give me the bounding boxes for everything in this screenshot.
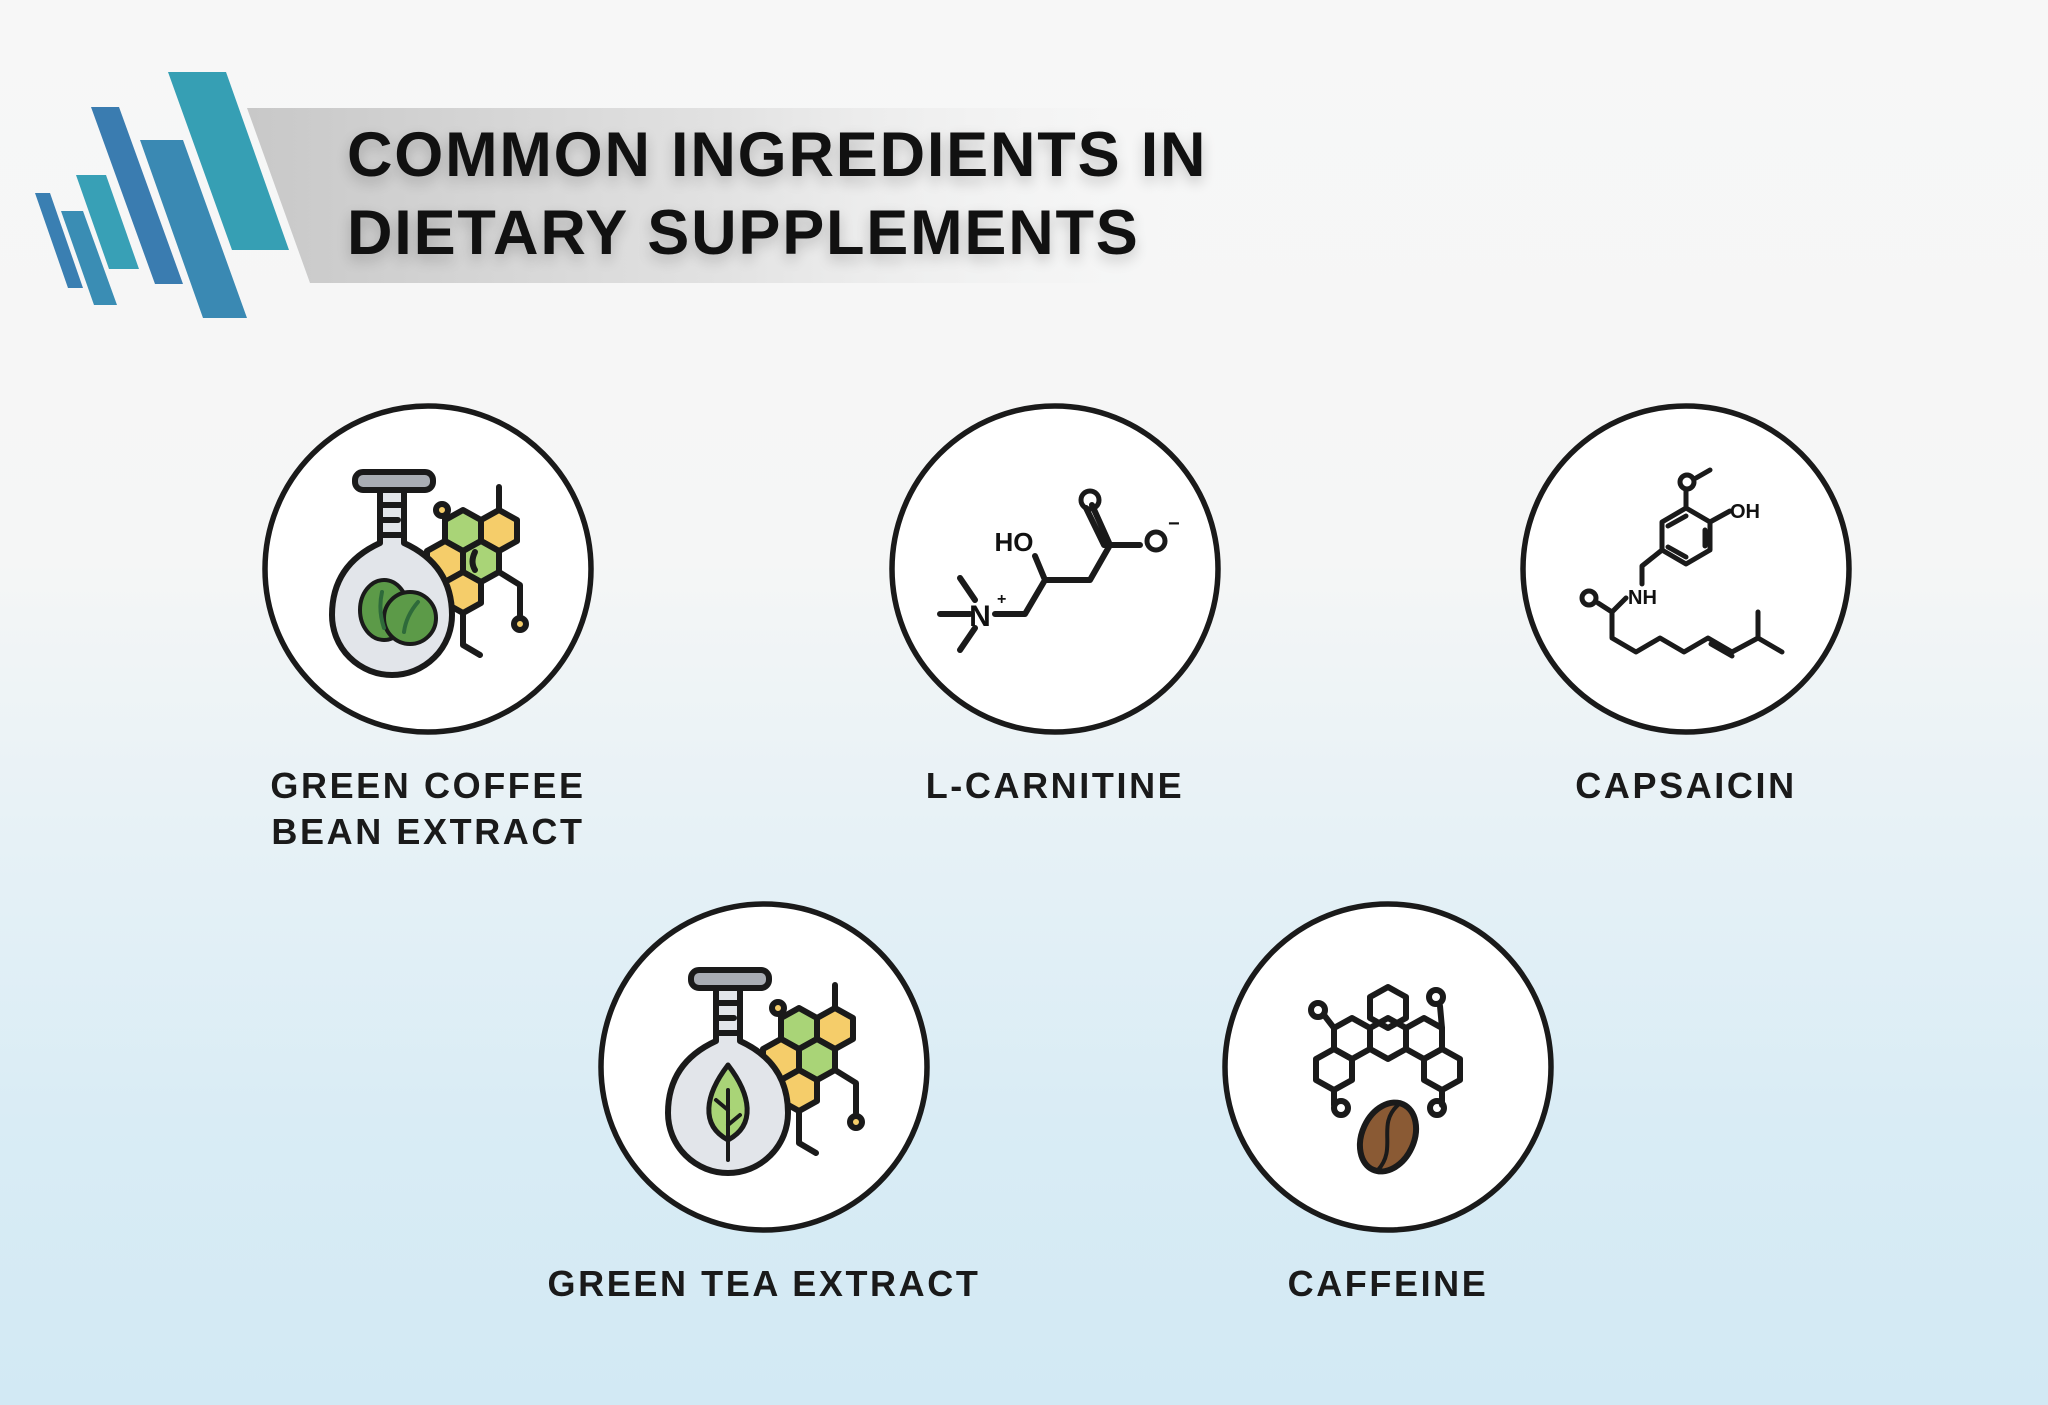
icon: capsaicin structure [1523,406,1849,732]
title: COMMON INGREDIENTS IN [347,120,1207,190]
header logo: slanted bars [35,72,910,318]
label: capsaicin: CAPSAICIN [1575,765,1797,806]
icon: L-carnitine structure: N [969,600,991,633]
bars [35,72,289,318]
title: DIETARY SUPPLEMENTS [347,198,1140,268]
label: green coffee bean extract: BEAN EXTRACT [271,811,585,852]
label: green coffee bean extract [270,765,586,852]
label: green coffee bean extract: GREEN COFFEE [270,765,586,806]
icon: green coffee bean extract [265,406,591,732]
icon: L-carnitine structure [892,406,1218,732]
icon: L-carnitine structure: − [1168,513,1180,535]
icon: L-carnitine structure: HO [994,527,1034,557]
icon: capsaicin structure: OH [1730,501,1760,523]
icon: caffeine [1225,904,1551,1230]
gray title band [247,108,1200,283]
icon: green tea extract [601,904,927,1230]
title [344,120,1208,268]
icon: capsaicin structure: NH [1628,587,1657,609]
label: L-carnitine: L-CARNITINE [926,765,1184,806]
label: green tea extract: GREEN TEA EXTRACT [548,1263,980,1304]
label: caffeine: CAFFEINE [1288,1263,1488,1304]
icon: L-carnitine structure: + [997,591,1006,608]
